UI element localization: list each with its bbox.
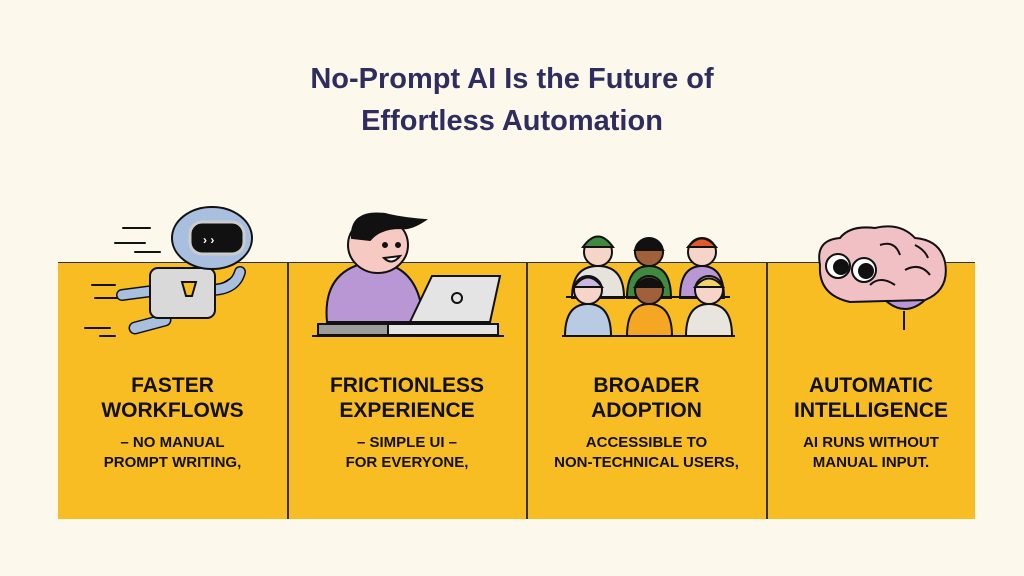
column: broader adoption: NON-TECHNICAL USERS, <box>554 454 739 471</box>
column: frictionless experience: EXPERIENCE <box>339 399 475 422</box>
column: broader adoption: ADOPTION <box>591 399 702 422</box>
column: automatic intelligence: MANUAL INPUT. <box>813 454 929 471</box>
icon: group of people <box>562 236 735 336</box>
column: frictionless experience: FRICTIONLESS <box>330 374 484 397</box>
icon: brain <box>819 226 946 330</box>
column: faster workflows: FASTER <box>131 374 214 397</box>
column: faster workflows <box>101 374 244 471</box>
icon: person with laptop <box>312 214 504 336</box>
column: faster workflows: PROMPT WRITING, <box>104 454 241 471</box>
column: frictionless experience <box>330 374 484 471</box>
column: automatic intelligence: INTELLIGENCE <box>794 399 948 422</box>
icon: running robot <box>85 207 252 336</box>
title <box>310 63 714 137</box>
column: broader adoption: BROADER <box>593 374 700 397</box>
title: No-Prompt AI Is the Future of <box>310 63 714 95</box>
column: faster workflows: – NO MANUAL <box>120 434 225 451</box>
column: frictionless experience: – SIMPLE UI – <box>357 434 457 451</box>
title: Effortless Automation <box>361 105 663 137</box>
panel: benefits <box>58 262 975 519</box>
column: automatic intelligence: AUTOMATIC <box>809 374 933 397</box>
column: faster workflows: WORKFLOWS <box>101 399 244 422</box>
column: broader adoption <box>554 374 739 471</box>
illustrations: › › <box>203 233 214 247</box>
column: frictionless experience: FOR EVERYONE, <box>346 454 468 471</box>
column: automatic intelligence <box>794 374 948 471</box>
column: broader adoption: ACCESSIBLE TO <box>586 434 707 451</box>
column: automatic intelligence: AI RUNS WITHOUT <box>803 434 939 451</box>
